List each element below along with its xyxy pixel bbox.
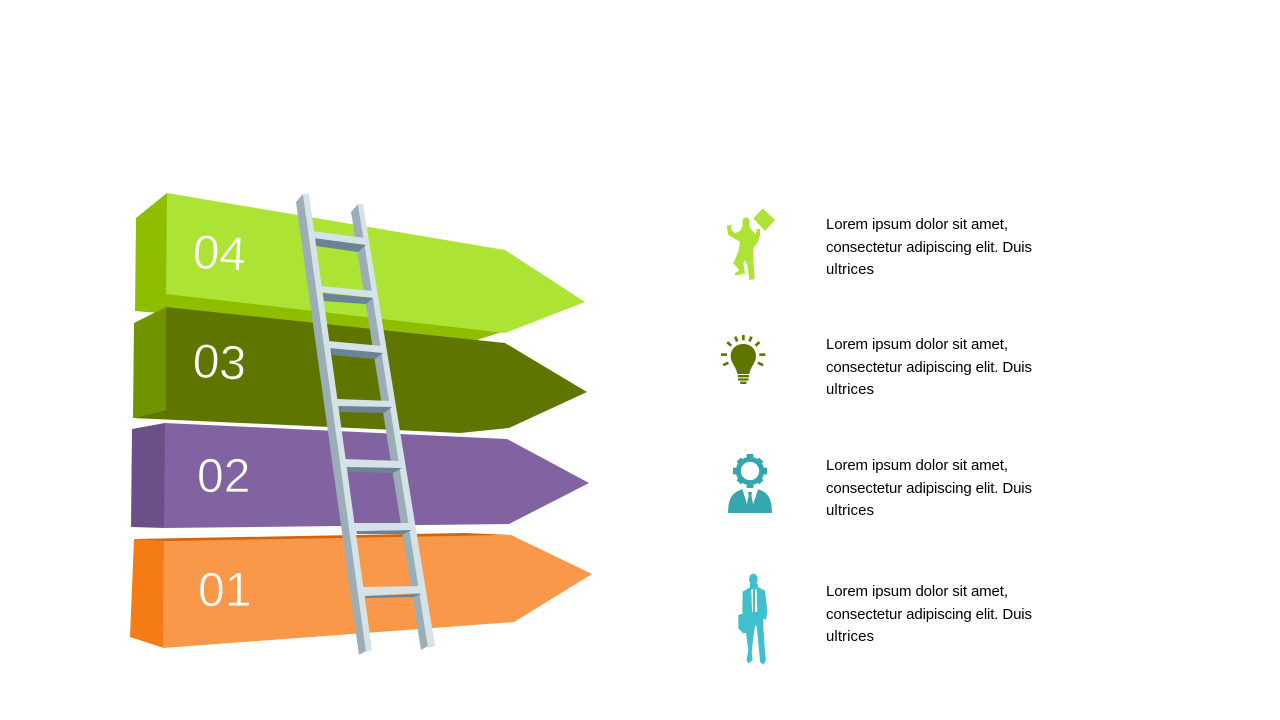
icon: light bulb (721, 335, 765, 384)
text block 4: ultrices (826, 261, 874, 278)
text block 2: ultrices (826, 502, 874, 519)
arrow 01 orange: 01 (198, 564, 251, 617)
text block 1: Lorem ipsum dolor sit amet, (826, 583, 1008, 600)
text block 3: ultrices (826, 381, 874, 398)
arrow 02 purple (131, 423, 589, 528)
arrow 03 dark green: 03 (191, 335, 248, 391)
text block 2 (826, 457, 1032, 519)
text block 1: ultrices (826, 628, 874, 645)
arrow 01 orange (130, 533, 592, 648)
text block 2: consectetur adipiscing elit. Duis (826, 480, 1032, 497)
icon: businessman with briefcase (738, 574, 767, 665)
text block 3: consectetur adipiscing elit. Duis (826, 359, 1032, 376)
text block 2: Lorem ipsum dolor sit amet, (826, 457, 1008, 474)
text block 1: consectetur adipiscing elit. Duis (826, 606, 1032, 623)
text block 4: consectetur adipiscing elit. Duis (826, 239, 1032, 256)
ladder (296, 194, 435, 655)
icon: gear-head person (728, 454, 772, 513)
text block 3: Lorem ipsum dolor sit amet, (826, 336, 1008, 353)
text block 3 (826, 336, 1032, 398)
arrow 02 purple: 02 (197, 450, 250, 503)
text block 4: Lorem ipsum dolor sit amet, (826, 216, 1008, 233)
arrow 03 dark green (133, 307, 587, 433)
text block 1 (826, 583, 1032, 645)
arrow 04 light green (135, 193, 585, 340)
text block 4 (826, 216, 1032, 278)
arrow 04 light green: 04 (191, 226, 248, 282)
icon: businessman with document (727, 208, 775, 280)
